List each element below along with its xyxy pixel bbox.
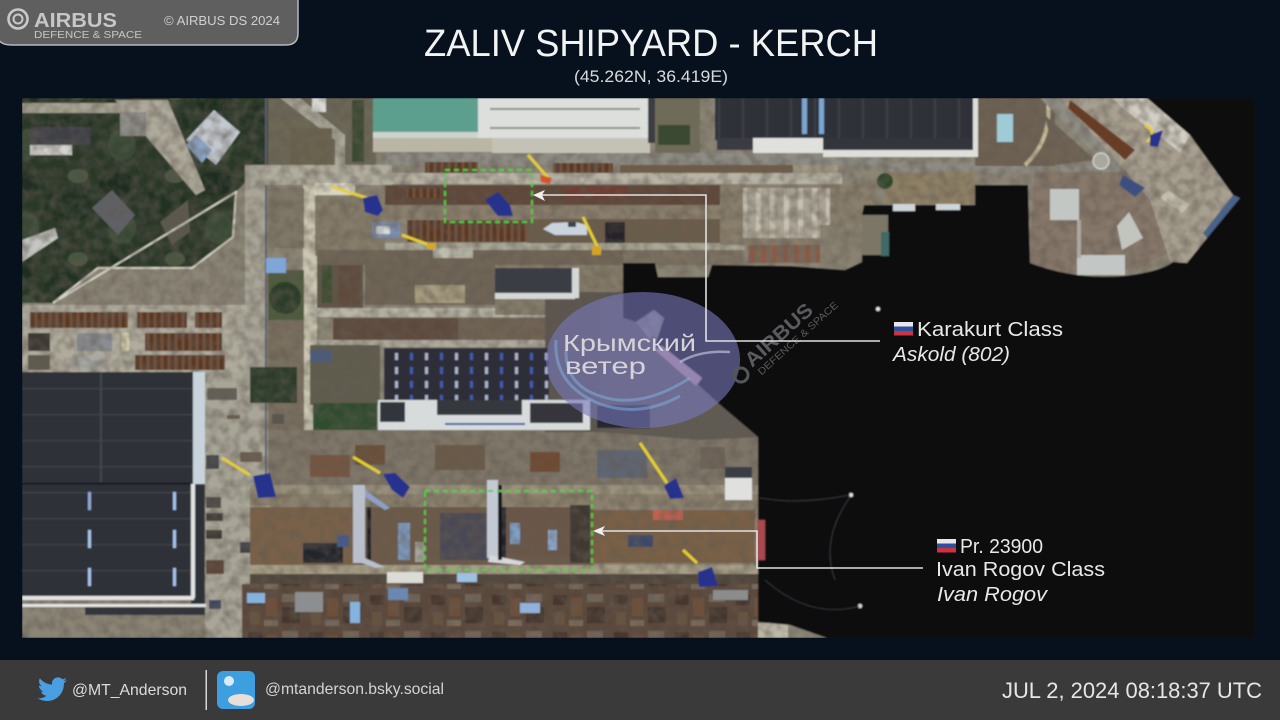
bluesky handle: @mtanderson.bsky.social	[265, 681, 444, 698]
timestamp: JUL 2, 2024 08:18:37 UTC	[1002, 678, 1262, 703]
flag: Russia (second)	[937, 539, 956, 552]
large hall west	[22, 372, 206, 615]
concrete apron and parked units beside hall	[205, 372, 289, 638]
south shipyard	[242, 430, 788, 638]
east yard surface markings	[997, 100, 1240, 275]
moored ship under construction	[543, 222, 587, 235]
mid-west plots	[250, 188, 548, 440]
leader arrow: Ivan Rogov	[593, 526, 923, 568]
flag: Russia	[894, 322, 913, 336]
title: ZALIV SHIPYARD - KERCH	[424, 23, 878, 65]
north shipway and rust bands	[315, 153, 885, 315]
vegetated compound north-west	[22, 98, 376, 303]
badge: Airbus copyright	[0, 0, 298, 45]
badge: Airbus copyright: © AIRBUS DS 2024	[164, 14, 280, 28]
pink vessel at the quay	[655, 346, 702, 386]
callout: Ivan Rogov Class: Pr. 23900	[960, 536, 1043, 558]
callout: Karakurt Class	[892, 319, 1063, 366]
land under ellipse	[545, 292, 758, 440]
callout: Karakurt Class: Askold (802)	[892, 344, 1010, 366]
ellipse watermark: Крымский ветер	[546, 292, 740, 428]
satellite image panel	[22, 98, 1255, 638]
diagonal Airbus watermark	[741, 284, 841, 379]
diagonal Airbus watermark: AIRBUS	[741, 299, 818, 372]
badge: Airbus copyright: AIRBUS	[34, 10, 117, 32]
callout: Ivan Rogov Class: Ivan Rogov	[937, 584, 1048, 606]
leader arrow: Karakurt	[533, 190, 880, 341]
ellipse watermark: Крымский ветер: ветер	[565, 353, 646, 379]
coordinates subtitle: (45.262N, 36.419E)	[574, 67, 728, 86]
small warehouse	[495, 268, 579, 299]
gantry frames	[353, 480, 525, 568]
blue-roof sheds	[247, 258, 752, 623]
water	[623, 98, 1255, 638]
watermark swirl	[734, 368, 748, 382]
ellipse watermark: Крымский ветер: Крымский	[563, 330, 696, 356]
land base	[22, 98, 1255, 638]
rust storage rows west	[22, 305, 247, 373]
callout: Ivan Rogov Class	[936, 536, 1105, 606]
central vertical road	[240, 98, 392, 638]
footer bar	[0, 660, 1280, 720]
icon: sky avatar	[217, 671, 255, 709]
badge: Airbus copyright: DEFENCE & SPACE	[34, 29, 142, 41]
icon: Airbus swirl	[8, 10, 28, 28]
green dashed box: Ivan Rogov	[425, 491, 592, 570]
icon: twitter bird	[38, 677, 67, 701]
ground texture	[22, 98, 1255, 638]
north hall with skylights	[378, 348, 650, 430]
diagonal Airbus watermark: DEFENCE & SPACE	[756, 300, 841, 378]
top buildings	[373, 98, 978, 157]
callout: Ivan Rogov Class: Ivan Rogov Class	[936, 559, 1105, 581]
cranes	[222, 125, 1163, 587]
callout: Karakurt Class: Karakurt Class	[917, 319, 1063, 341]
green dashed box: Askold	[445, 170, 532, 222]
east yard and helipads	[877, 98, 1240, 276]
twitter handle: @MT_Anderson	[72, 682, 187, 699]
